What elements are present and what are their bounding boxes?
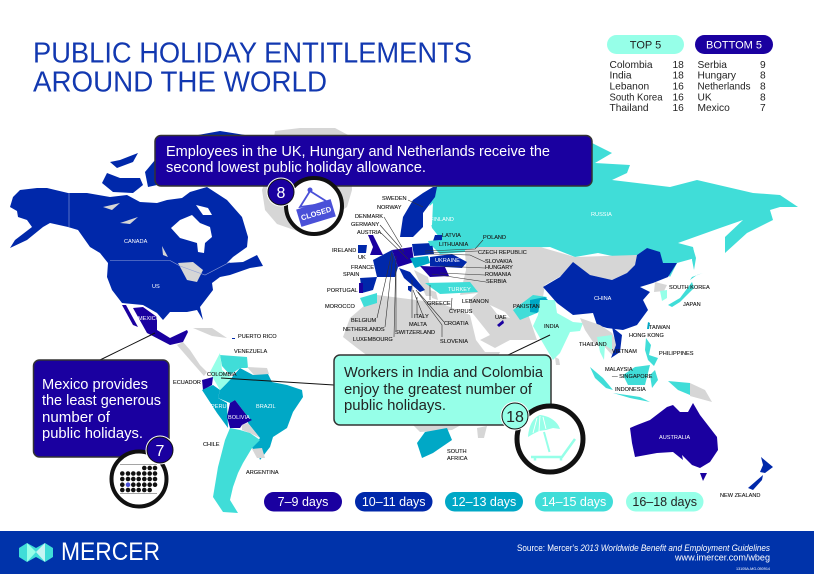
country labels: CHILE <box>203 442 220 448</box>
title <box>33 37 472 99</box>
panel: bottom 5 table: Mexico <box>698 103 730 114</box>
arrow: colombia leader <box>221 378 334 385</box>
country labels: JAPAN <box>683 302 701 308</box>
labels on dark countries: CHINA <box>594 296 612 302</box>
country labels: UAE <box>495 315 507 321</box>
country labels: INDONESIA <box>615 387 646 393</box>
greenland <box>262 128 352 232</box>
country labels: CYPRUS <box>449 309 473 315</box>
country labels: VIETNAM <box>612 349 637 355</box>
labels on dark countries: AUSTRALIA <box>659 435 690 441</box>
country labels: AFRICA <box>447 456 468 462</box>
australia <box>630 403 718 468</box>
callout: india and colombia: public holidays. <box>344 397 446 414</box>
panel: bottom 5 table: 9 <box>760 60 766 71</box>
panel: top 5 table: South Korea <box>610 92 663 104</box>
legend: 7–9 days <box>278 495 328 509</box>
labels on dark countries: FINLAND <box>430 217 454 223</box>
country labels: ECUADOR <box>173 380 201 386</box>
panel: top 5 table: Lebanon <box>610 82 649 92</box>
labels on dark countries: BOLIVIA <box>228 415 250 421</box>
mercer logo <box>19 538 160 566</box>
new zealand <box>748 457 773 490</box>
country labels: CZECH REPUBLIC <box>478 250 527 256</box>
country labels: DENMARK <box>355 214 383 220</box>
labels on dark countries: US <box>152 284 160 290</box>
title: AROUND THE WORLD <box>33 67 327 99</box>
country labels <box>173 196 760 499</box>
panel: bottom 5 table: Netherlands <box>698 82 750 92</box>
callout: uk hungary netherlands: second lowest public holiday allowance. <box>166 159 426 176</box>
labels on dark countries: TURKEY <box>448 287 471 293</box>
country labels: MALTA <box>409 322 427 328</box>
country labels: CROATIA <box>444 321 469 327</box>
source text: www.imercer.com/wbeg <box>674 552 770 562</box>
callout: mexico: Mexico provides <box>42 377 148 393</box>
country labels: THAILAND <box>579 342 607 348</box>
icon: calendar <box>112 452 166 506</box>
callout: uk hungary netherlands <box>155 136 592 186</box>
labels on dark countries: BRAZIL <box>256 404 276 410</box>
country labels: SOUTH KOREA <box>669 285 710 291</box>
country labels: LEBANON <box>462 299 489 305</box>
country labels: HUNGARY <box>485 265 513 271</box>
country labels: ITALY <box>414 314 429 320</box>
labels on dark countries <box>124 212 690 441</box>
panel: top 5 table: Thailand <box>610 103 649 114</box>
country labels: GREECE <box>427 301 451 307</box>
country labels: LUXEMBOURG <box>353 337 393 343</box>
country labels: SWEDEN <box>382 196 407 202</box>
source text <box>517 543 770 571</box>
country labels: BELGIUM <box>351 318 377 324</box>
badge: 18: 18 <box>506 409 524 426</box>
legend: 16–18 days <box>632 495 697 509</box>
legend <box>264 492 704 512</box>
panel: top 5 table: 18 <box>672 70 684 82</box>
callout: mexico: number of <box>42 410 111 426</box>
panel: top 5 table: Colombia <box>610 60 653 71</box>
panel: top 5 table: 18 <box>672 60 684 71</box>
arrow: india leader <box>508 335 550 355</box>
labels on dark countries: UKRAINE <box>435 258 460 264</box>
country labels: ARGENTINA <box>246 470 279 476</box>
callout: uk hungary netherlands: Employees in the UK, Hungary and Netherlands receive the <box>166 143 550 160</box>
footer band <box>0 531 814 574</box>
country labels: MOROCCO <box>325 304 355 310</box>
country labels: SWITZERLAND <box>395 330 435 336</box>
panel: top 5 table: 16 <box>672 103 684 114</box>
country labels: AUSTRIA <box>357 230 382 236</box>
labels on dark countries: PERU <box>211 404 227 410</box>
country labels: GERMANY <box>351 222 380 228</box>
country labels: NEW ZEALAND <box>720 493 760 499</box>
callout: india and colombia: Workers in India and Colombia <box>344 364 544 381</box>
icon: closed sign <box>286 178 342 234</box>
badge: 8 <box>266 178 296 206</box>
panel: top 5 table: 16 <box>672 92 684 104</box>
country labels: — SINGAPORE <box>612 374 653 380</box>
panel: top 5 table: India <box>610 70 632 82</box>
icon: closed sign: CLOSED <box>300 204 333 222</box>
leader lines <box>377 200 486 337</box>
country labels: COLOMBIA <box>207 372 237 378</box>
country labels: SLOVENIA <box>440 339 468 345</box>
panel: bottom 5 table: 8 <box>760 70 766 82</box>
callout: india and colombia <box>334 355 551 425</box>
title: PUBLIC HOLIDAY ENTITLEMENTS <box>33 37 472 69</box>
labels on dark countries: CANADA <box>124 239 148 245</box>
country labels: INDIA <box>544 324 559 330</box>
country labels: SPAIN <box>343 272 359 278</box>
country labels: LITHUANIA <box>439 242 468 248</box>
country labels: SERBIA <box>486 279 507 285</box>
panel: bottom 5 table: UK <box>698 92 712 104</box>
asia and russia <box>423 143 798 402</box>
source text: 13105A-MG-050914 <box>736 567 770 571</box>
country labels: NORWAY <box>377 205 402 211</box>
africa <box>343 295 500 432</box>
country labels: SLOVAKIA <box>485 259 513 265</box>
country labels: PORTUGAL <box>327 288 358 294</box>
arrow: mexico callout leader <box>100 333 155 360</box>
panel: bottom 5 table: Hungary <box>698 70 737 82</box>
mercer logo: MERCER <box>61 538 160 566</box>
country labels: LATVIA <box>442 233 461 239</box>
north america <box>10 131 263 376</box>
europe <box>358 187 478 300</box>
panel: top 5 table <box>607 35 684 114</box>
country labels: MALAYSIA <box>605 367 633 373</box>
world map <box>10 128 798 513</box>
panel: bottom 5 table <box>695 35 773 114</box>
country labels: POLAND <box>483 235 506 241</box>
callout: mexico: the least generous <box>42 393 161 409</box>
country labels: ROMANIA <box>485 272 511 278</box>
callout: mexico: public holidays. <box>42 426 143 442</box>
badge: 18 <box>500 402 530 430</box>
legend: 10–11 days <box>362 495 426 509</box>
country labels: SOUTH <box>447 449 467 455</box>
country labels: PUERTO RICO <box>238 334 277 340</box>
badge: 8: 8 <box>277 185 286 202</box>
country labels: VENEZUELA <box>234 349 268 355</box>
source text: Source: Mercer's 2013 Worldwide Benefit and Employment Guidelines <box>517 543 770 553</box>
country labels: FRANCE <box>351 265 374 271</box>
panel: bottom 5 table: 8 <box>760 92 766 104</box>
country labels: IRELAND <box>332 248 356 254</box>
panel: bottom 5 table: 8 <box>760 82 766 92</box>
legend: 12–13 days <box>452 495 516 509</box>
callout: mexico <box>34 360 169 457</box>
country labels: HONG KONG <box>629 333 664 339</box>
panel: bottom 5 table: Serbia <box>698 60 727 71</box>
icon: beach umbrella and lounger <box>517 406 583 472</box>
labels on dark countries: MEXICO <box>138 316 161 322</box>
country labels: PHILIPPINES <box>659 351 694 357</box>
country labels: PAKISTAN <box>513 304 540 310</box>
panel: top 5 table: 16 <box>672 82 684 92</box>
country labels: TAIWAN <box>649 325 670 331</box>
labels on dark countries: RUSSIA <box>591 212 612 218</box>
legend: 14–15 days <box>542 495 606 509</box>
country labels: NETHERLANDS <box>343 327 385 333</box>
panel: bottom 5 table: 7 <box>760 103 766 114</box>
callout: india and colombia: enjoy the greatest number of <box>344 381 533 398</box>
panel: bottom 5 table: BOTTOM 5 <box>706 40 762 52</box>
country labels: UK <box>358 255 366 261</box>
badge: 7 <box>146 436 174 464</box>
badge: 7: 7 <box>156 443 165 460</box>
panel: top 5 table: TOP 5 <box>630 40 661 52</box>
south america <box>202 353 303 513</box>
